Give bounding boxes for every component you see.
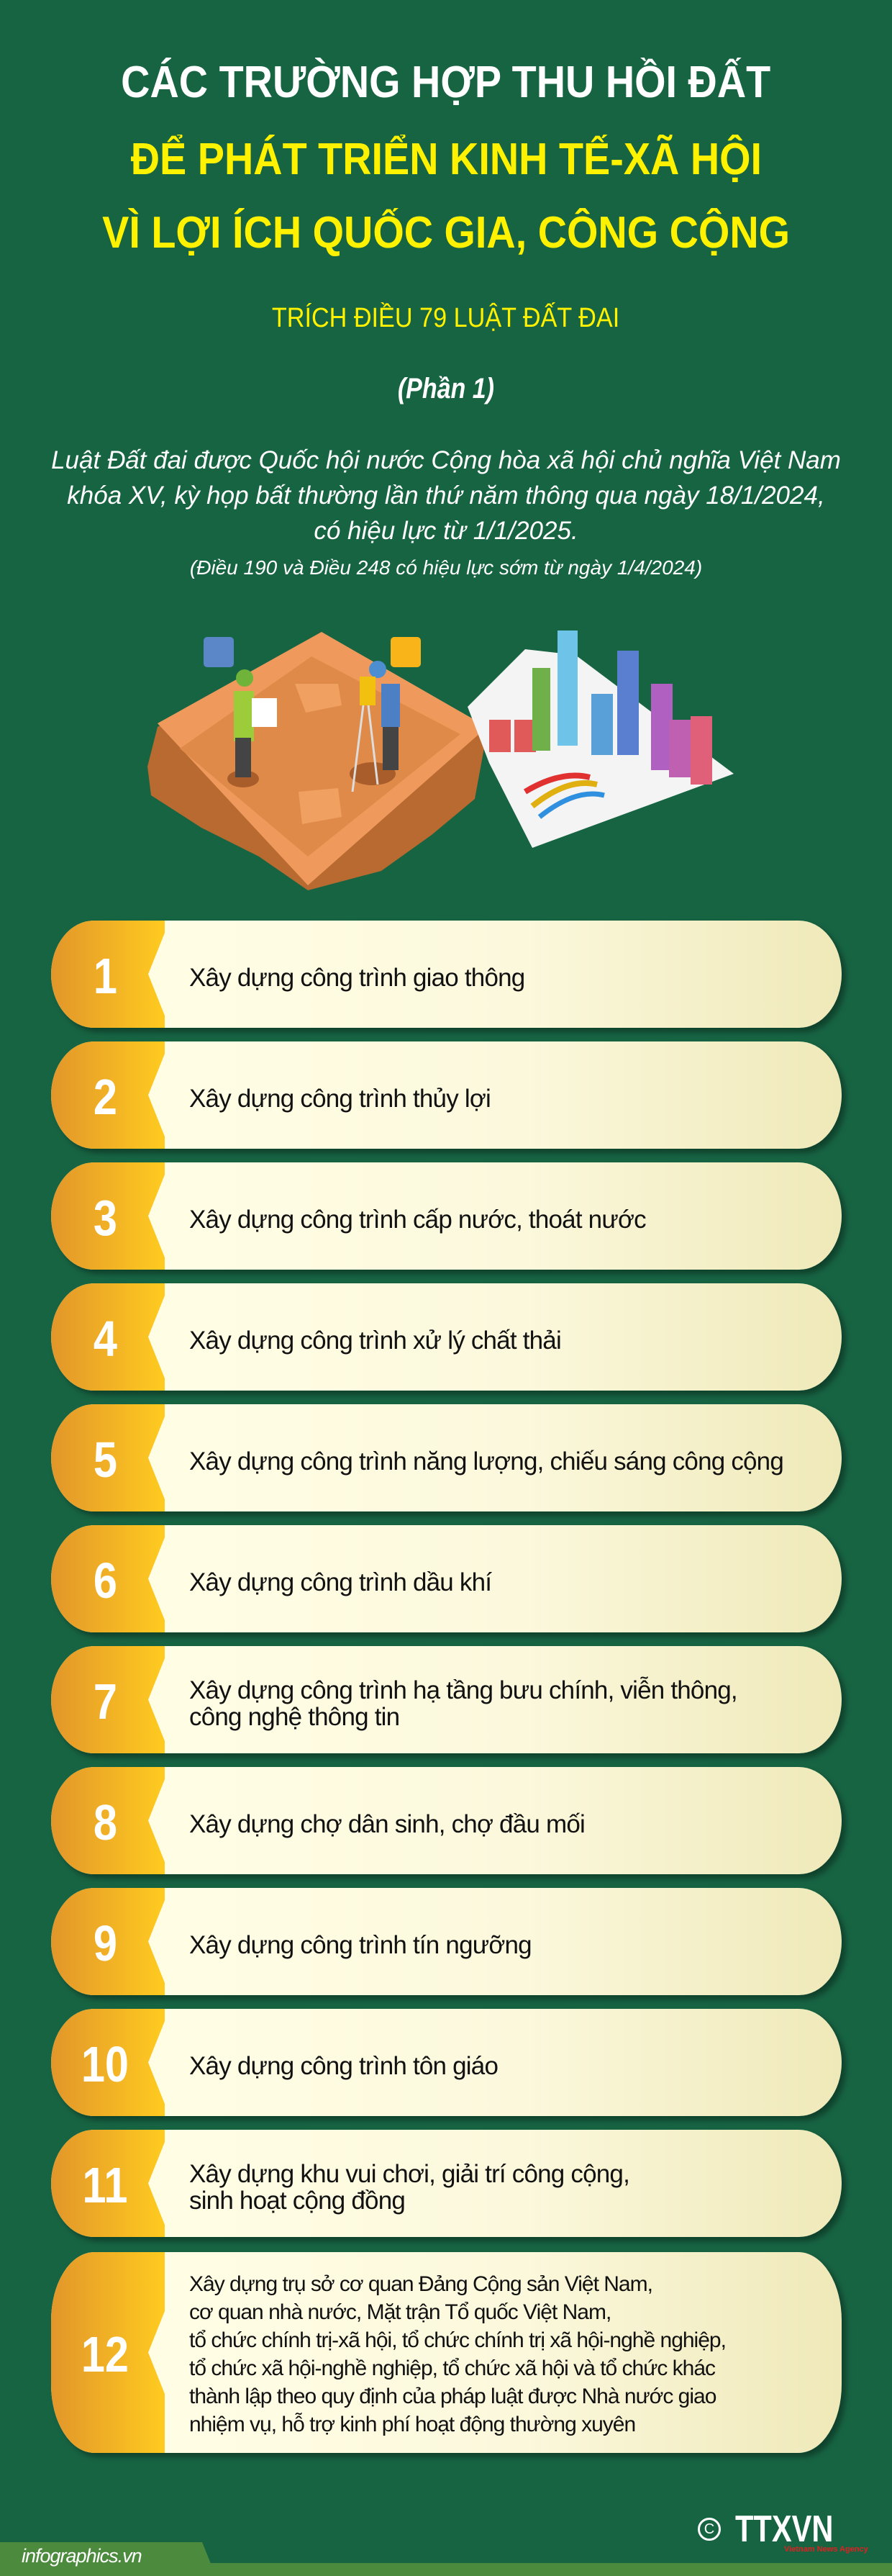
card 2 [51, 1041, 842, 1149]
card 12: nhiệm vụ, hỗ trợ kinh phí hoạt động thường xuyên [189, 2413, 635, 2436]
card 3: 3 [93, 1189, 117, 1245]
card 6 [51, 1525, 842, 1632]
card 5: 5 [93, 1431, 117, 1487]
logo: TTXVN: TTXVN [735, 2508, 833, 2550]
card 4: 4 [93, 1310, 117, 1366]
card 10: 10 [81, 2035, 129, 2092]
card 12: 12 [81, 2326, 129, 2382]
title line 2: ĐỂ PHÁT TRIỂN KINH TẾ-XÃ HỘI [130, 135, 762, 184]
intro paragraph: Luật Đất đai được Quốc hội nước Cộng hòa xã hội chủ nghĩa Việt Nam [51, 446, 841, 474]
card 4 [51, 1283, 842, 1391]
card 10 [51, 2009, 842, 2116]
card 6: 6 [93, 1552, 117, 1608]
title line 3: VÌ LỢI ÍCH QUỐC GIA, CÔNG CỘNG [102, 208, 790, 258]
footer band [0, 2542, 892, 2576]
card 1: 1 [93, 947, 117, 1003]
card 12: thành lập theo quy định của pháp luật được Nhà nước giao [189, 2384, 716, 2408]
card 3: Xây dựng công trình cấp nước, thoát nước [189, 1206, 646, 1234]
intro paragraph: (Điều 190 và Điều 248 có hiệu lực sớm từ ngày 1/4/2024) [190, 556, 702, 579]
card 1 [51, 921, 842, 1028]
card 7: Xây dựng công trình hạ tầng bưu chính, viễn thông, [189, 1676, 737, 1704]
part label: (Phần 1) [398, 373, 494, 405]
intro paragraph: khóa XV, kỳ họp bất thường lần thứ năm thông qua ngày 18/1/2024, [67, 482, 825, 510]
intro paragraph: có hiệu lực từ 1/1/2025. [314, 517, 578, 545]
card 9: Xây dựng công trình tín ngưỡng [189, 1931, 532, 1959]
logo: TTXVN [698, 2508, 868, 2554]
card 2: 2 [93, 1068, 117, 1124]
subtitle: TRÍCH ĐIỀU 79 LUẬT ĐẤT ĐAI [272, 303, 620, 333]
illustration: surveyors on land and bar chart [147, 631, 734, 890]
card 7: 7 [93, 1673, 117, 1729]
footer tab: infographics.vn: infographics.vn [22, 2545, 142, 2567]
card 1: Xây dựng công trình giao thông [189, 964, 524, 992]
card 5 [51, 1404, 842, 1511]
card 9: 9 [93, 1915, 117, 1971]
card 12 [51, 2252, 842, 2453]
card 10: Xây dựng công trình tôn giáo [189, 2052, 498, 2080]
card 12: Xây dựng trụ sở cơ quan Đảng Cộng sản Việt Nam, [189, 2272, 652, 2296]
logo: TTXVN: Vietnam News Agency [784, 2545, 868, 2554]
card 4: Xây dựng công trình xử lý chất thải [189, 1327, 561, 1355]
card 7 [51, 1646, 842, 1753]
icon: land platform with surveyors [147, 632, 487, 890]
card 5: Xây dựng công trình năng lượng, chiếu sáng công cộng [189, 1447, 783, 1475]
card 12: tổ chức chính trị-xã hội, tổ chức chính trị xã hội-nghề nghiệp, [189, 2328, 726, 2352]
card 12: tổ chức xã hội-nghề nghiệp, tổ chức xã hội và tổ chức khác [189, 2356, 715, 2380]
card 6: Xây dựng công trình dầu khí [189, 1568, 491, 1596]
card 11: Xây dựng khu vui chơi, giải trí công cộng, [189, 2159, 629, 2188]
card 11: sinh hoạt cộng đồng [189, 2187, 405, 2214]
card 9 [51, 1888, 842, 1995]
card 8: 8 [93, 1794, 117, 1850]
card 8 [51, 1767, 842, 1874]
logo: TTXVN: C [704, 2521, 714, 2537]
card 3 [51, 1162, 842, 1270]
card 11: 11 [83, 2156, 127, 2213]
icon: 3d bar chart [468, 631, 734, 848]
card 2: Xây dựng công trình thủy lợi [189, 1085, 491, 1113]
card 8: Xây dựng chợ dân sinh, chợ đầu mối [189, 1810, 585, 1838]
intro paragraph [51, 446, 841, 579]
card 11 [51, 2130, 842, 2237]
footer tab: infographics.vn [0, 2542, 211, 2567]
card 12: cơ quan nhà nước, Mặt trận Tổ quốc Việt Nam, [189, 2300, 611, 2323]
title line 1: CÁC TRƯỜNG HỢP THU HỒI ĐẤT [121, 58, 771, 107]
card 7: công nghệ thông tin [189, 1703, 399, 1730]
